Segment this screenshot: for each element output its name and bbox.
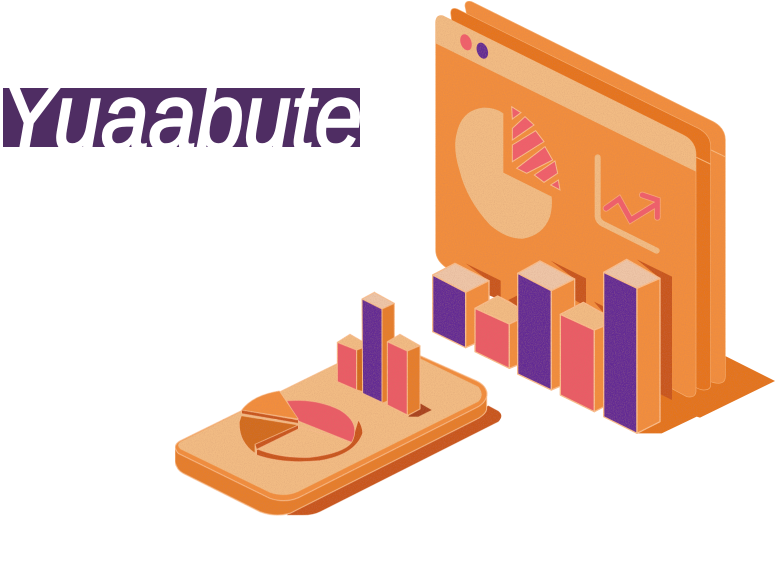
sector divider (255, 425, 298, 449)
small bar 1 (337, 334, 363, 392)
line chart: rising arrow (606, 195, 657, 220)
pie chart: striped pink sector (512, 107, 560, 190)
bar 1: purple (433, 263, 489, 348)
front window layer (436, 16, 696, 397)
floor shadow under dashboard (637, 353, 775, 433)
beige sector (257, 427, 352, 457)
back window layer (465, 1, 725, 383)
tablet top surface (178, 358, 482, 495)
bar 3: purple (518, 261, 575, 390)
orange sector (242, 391, 298, 419)
icon: window dots (458, 33, 490, 60)
line chart: axes (598, 157, 657, 251)
panel: dashboard window stack (436, 1, 725, 397)
logo: Yugabyte wordmark on purple band: Yuaabute (0, 64, 362, 171)
small bar 3 (387, 334, 420, 416)
small bar chart (337, 292, 420, 416)
sector separator (242, 410, 298, 423)
middle window layer (451, 8, 711, 390)
bar 4: pink (560, 302, 604, 412)
small bar 2 (362, 292, 394, 403)
dark sector (239, 416, 298, 453)
small bar shadow (408, 402, 432, 417)
bar 5: purple (604, 259, 660, 433)
bar chart: large isometric bars (433, 259, 672, 433)
bar shadows (466, 259, 672, 400)
pie chart: beige sector (455, 108, 552, 239)
pie chart on tablet (239, 391, 363, 462)
panel: tablet with pie and bars (175, 292, 501, 515)
tablet rim (175, 356, 487, 501)
panel edge stripes (696, 150, 725, 164)
tablet side wall (175, 392, 487, 515)
pie base ring (257, 420, 363, 462)
pink sector (287, 400, 355, 442)
tablet ground shadow (287, 406, 501, 515)
illustration: isometric dashboard (175, 1, 775, 515)
bar 2: pink (475, 296, 518, 368)
window header bar (436, 16, 696, 172)
logo: Yugabyte wordmark on purple band (3, 88, 360, 147)
